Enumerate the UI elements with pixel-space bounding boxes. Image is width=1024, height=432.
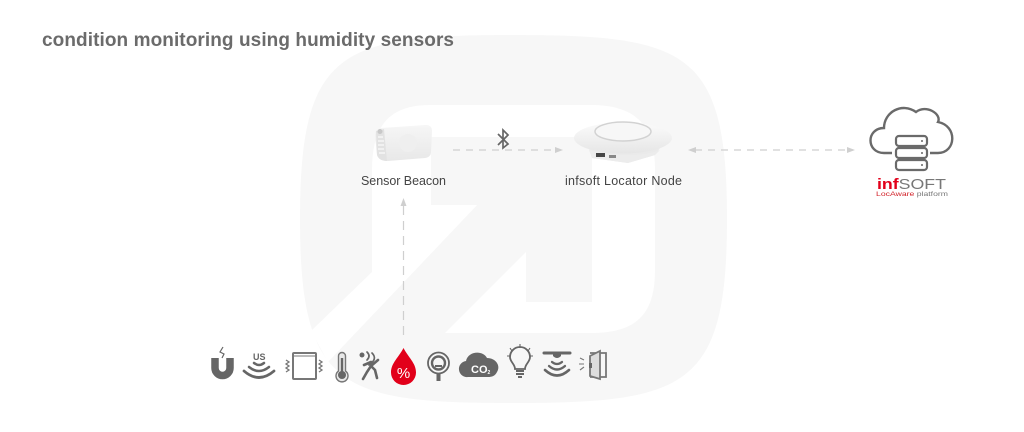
icon: cloud with server [870,108,952,170]
icon: bluetooth [498,130,508,148]
icon: CO2 cloud: CO [471,364,488,376]
device: infsoft locator node [574,122,672,163]
arrow: beacon to node [453,147,563,153]
logo: infsoft LocAware platform: infSOFT [877,176,946,193]
icon: light bulb [507,344,533,377]
label: Sensor Beacon: Sensor Beacon [361,174,446,188]
icon: ultrasonic [244,352,274,378]
icon: humidity drop: % [397,365,410,382]
logo: infsoft LocAware platform: LocAware platform [876,192,948,198]
icon: ultrasonic: US [253,352,266,362]
title: condition monitoring using humidity sensors [42,30,454,51]
icon: motion [360,352,378,379]
background logo watermark [300,35,727,403]
icon: vibration box [286,353,322,379]
icon: ceiling sensor [544,353,570,376]
label: infsoft Locator Node: infsoft Locator Node [565,174,682,188]
icon: CO2 cloud: 2 [488,370,490,376]
icon: thermometer [336,352,348,382]
icon: humidity drop [391,348,416,385]
icon: magnet [215,347,230,376]
icon: door sensor [579,351,606,379]
arrow: sensors to beacon [400,198,406,335]
arrow: node to cloud [688,147,855,153]
icon: CO2 cloud [459,353,498,377]
device: sensor beacon [375,125,432,161]
logo: infsoft LocAware platform [876,176,948,198]
icon: pressure gauge [428,352,449,381]
